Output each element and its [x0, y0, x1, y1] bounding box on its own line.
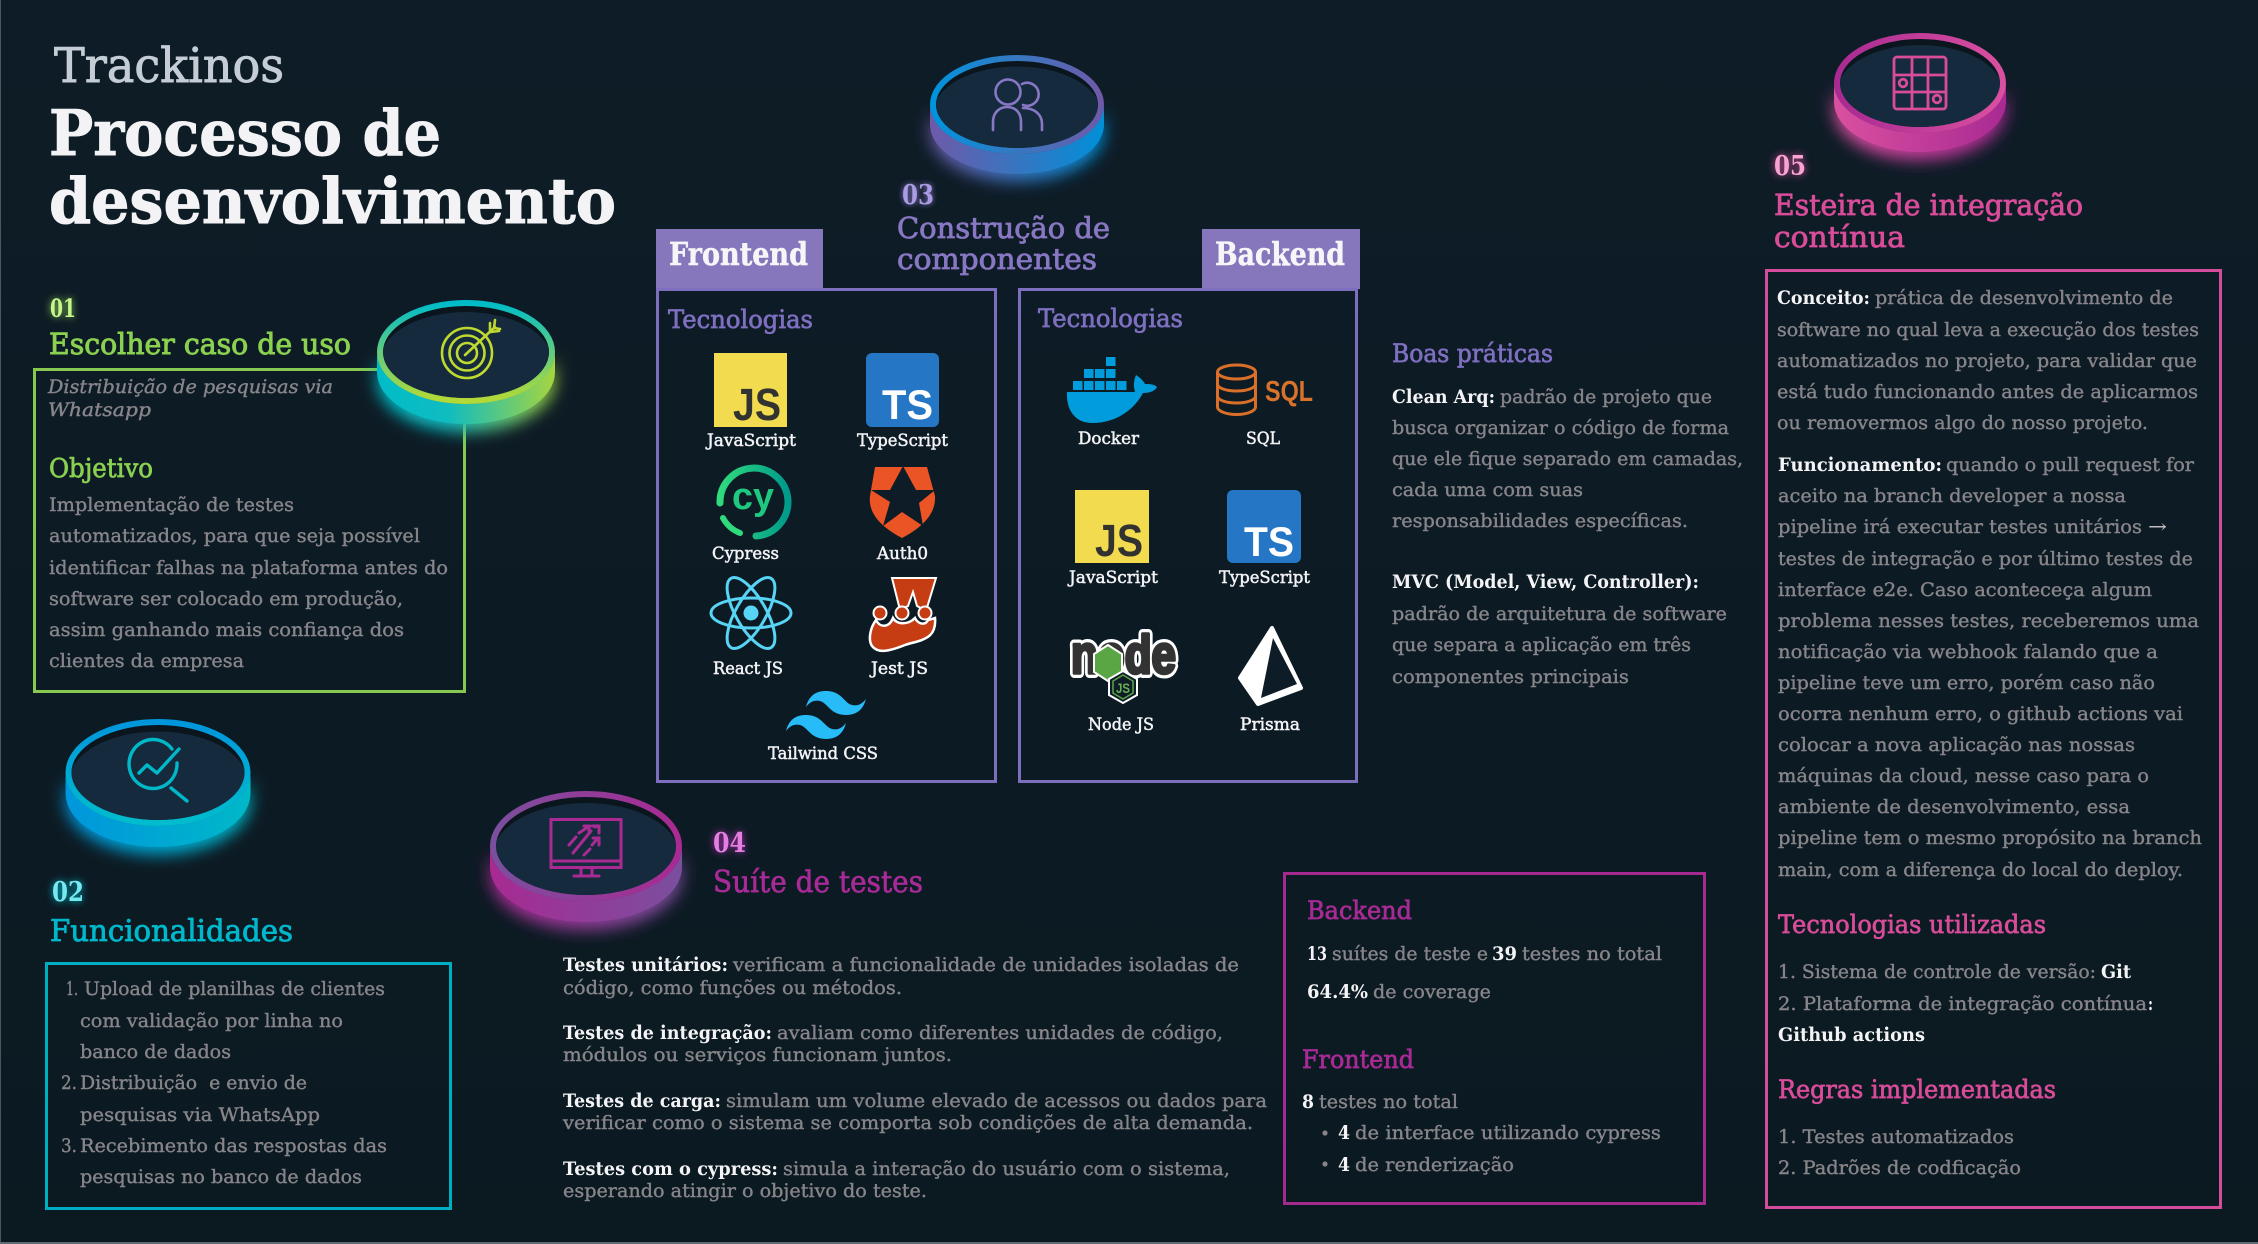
conceito: software no qual leva a execução dos testes	[1777, 319, 2199, 341]
box 05	[1766, 270, 2220, 1208]
tecnologias utilizadas list	[1778, 961, 2153, 1046]
box 01	[34, 370, 464, 692]
icon: people	[993, 80, 1042, 130]
testes unitarios	[563, 954, 1239, 999]
funcionamento: main, com a diferença do local do deploy.	[1778, 859, 2183, 881]
tech: JavaScript: JavaScript	[1067, 568, 1158, 588]
mvc text	[1392, 571, 1727, 688]
clean arq text: que ele fique separado em camadas,	[1392, 448, 1743, 470]
objetivo text: software ser colocado em produção,	[49, 588, 403, 610]
backend stats: 64.4%	[1307, 981, 1368, 1003]
section number 02: 02	[52, 877, 84, 908]
funcionamento: quando o pull request for	[1946, 454, 2195, 476]
funcionamento: testes de integração e por último testes de	[1778, 548, 2193, 570]
funcionamento: ocorra nenhum erro, o github actions vai	[1778, 703, 2183, 725]
heading 05	[1774, 188, 2083, 254]
tech: Jest JS	[869, 578, 936, 679]
frontend stats: 4	[1338, 1154, 1350, 1176]
section number 05: 05	[1774, 151, 1806, 182]
testes unitarios: Testes unitários:	[563, 954, 728, 976]
clean arq text: busca organizar o código de forma	[1392, 417, 1729, 439]
funcionamento: interface e2e. Caso aconteceça algum	[1778, 579, 2152, 601]
tech: SQL: SQL	[1246, 429, 1280, 449]
tech: TypeScript: TypeScript	[857, 431, 948, 451]
funcionamento: →	[2148, 516, 2167, 538]
objetivo text: identificar falhas na plataforma antes do	[49, 557, 448, 579]
heading 05: contínua	[1774, 220, 1905, 254]
funcionamento: notificação via webhook falando que a	[1778, 641, 2158, 663]
tab: frontend: Frontend	[669, 235, 808, 273]
objetivo text: assim ganhando mais confiança dos	[49, 619, 404, 641]
tech: Node JS: node	[1071, 625, 1176, 685]
tech: Tailwind CSS: Tailwind CSS	[768, 744, 878, 764]
conceito: prática de desenvolvimento de	[1875, 287, 2173, 309]
backend stats: 39	[1492, 943, 1517, 965]
objetivo text: clientes da empresa	[49, 650, 244, 672]
tecnologias utilizadas list: 2. Plataforma de integração contínua	[1778, 993, 2147, 1015]
tech: JavaScript: JS	[1095, 515, 1143, 566]
tech: Jest JS: Jest JS	[869, 659, 928, 679]
funcionamento: problema nesses testes, receberemos uma	[1778, 610, 2199, 632]
tech: TypeScript: TS	[1244, 518, 1294, 565]
icon: target	[442, 320, 500, 378]
clean arq text: padrão de projeto que	[1500, 386, 1712, 408]
testes de carga: simulam um volume elevado de acessos ou dados para	[726, 1090, 1267, 1112]
tab: frontend	[656, 229, 823, 289]
tech: Node JS: Node JS	[1088, 715, 1154, 735]
tech: Cypress: cy	[732, 476, 774, 518]
tech: TypeScript	[857, 353, 948, 451]
panel: boas praticas	[1392, 339, 1743, 688]
disc: grid icon	[1834, 36, 2006, 160]
tecnologias utilizadas list: :	[2148, 993, 2153, 1015]
testes unitarios: verificam a funcionalidade de unidades isoladas de	[732, 954, 1239, 976]
frontend heading: Frontend	[1302, 1045, 1414, 1074]
heading 03: Construção de	[897, 211, 1110, 245]
heading 02: Funcionalidades	[50, 914, 293, 949]
list 02: 3.	[61, 1135, 77, 1157]
backend stats: 13	[1307, 943, 1327, 965]
tech: Node JS: JS	[1116, 680, 1130, 696]
testes com o cypress	[563, 1158, 1230, 1202]
clean arq text	[1392, 386, 1743, 532]
backend stats	[1307, 943, 1662, 1003]
funcionamento: Funcionamento:	[1778, 454, 1942, 476]
tech: SQL: SQL	[1265, 376, 1313, 408]
testes com o cypress: esperando atingir o objetivo do teste.	[563, 1180, 927, 1202]
panel: resultados dos testes	[1284, 874, 1704, 1204]
tech: Docker: Docker	[1078, 429, 1140, 449]
tecnologias utilizadas list: 1. Sistema de controle de versão:	[1778, 961, 2096, 983]
testes de carga: Testes de carga:	[563, 1090, 721, 1112]
funcionamento: pipeline tem o mesmo propósito na branch	[1778, 827, 2202, 849]
frontend stats: de renderização	[1355, 1154, 1514, 1176]
mvc text: componentes principais	[1392, 666, 1629, 688]
objetivo text: Implementação de testes	[49, 494, 294, 516]
list 02	[61, 978, 387, 1188]
title: Processo de	[49, 96, 441, 170]
testes de integracao: avaliam como diferentes unidades de código,	[777, 1022, 1223, 1044]
conceito: ou removermos algo do nosso projeto.	[1777, 412, 2148, 434]
testes de integracao: Testes de integração:	[563, 1022, 772, 1044]
heading: Tecnologias	[1038, 304, 1183, 333]
tech: TypeScript: TS	[882, 381, 933, 428]
tech: JavaScript	[705, 353, 796, 451]
title	[49, 38, 616, 238]
testes de carga	[562, 1090, 1267, 1134]
section number 01: 01	[50, 294, 76, 323]
heading 03	[897, 211, 1110, 276]
tech: Prisma: Prisma	[1240, 715, 1300, 735]
backend heading: Backend	[1307, 896, 1412, 925]
frontend stats: de interface utilizando cypress	[1355, 1122, 1661, 1144]
panel: 03 construcao de componentes heading	[897, 180, 1110, 276]
title: Trackinos	[54, 38, 284, 94]
list 02: 2.	[61, 1072, 77, 1094]
clean arq text: responsabilidades específicas.	[1392, 510, 1688, 532]
regras implementadas list: 1. Testes automatizados	[1778, 1126, 2014, 1148]
tech: React JS: React JS	[713, 659, 783, 679]
objetivo text	[49, 494, 448, 672]
tech: JavaScript	[1067, 490, 1158, 588]
conceito: Conceito:	[1777, 287, 1870, 309]
panel: backend technologies	[1020, 290, 1356, 782]
mvc text: MVC (Model, View, Controller):	[1392, 571, 1699, 593]
tab: backend	[1202, 229, 1360, 289]
tech: React JS	[711, 571, 791, 679]
icon: magnifier chart	[129, 739, 187, 801]
heading 01: Escolher caso de uso	[49, 327, 351, 361]
tech: Tailwind CSS	[768, 691, 878, 764]
tech: JavaScript: JS	[733, 379, 781, 430]
panel: 02 funcionalidades	[46, 877, 450, 1208]
tech: Prisma	[1240, 628, 1301, 735]
tech: SQL	[1218, 365, 1313, 449]
frontend stats: 8	[1302, 1091, 1314, 1113]
testes com o cypress: Testes com o cypress:	[563, 1158, 778, 1180]
list 02: 1.	[66, 978, 78, 1000]
frontend stats	[1302, 1091, 1661, 1176]
heading 03: componentes	[897, 242, 1097, 276]
backend stats: testes no total	[1522, 943, 1662, 965]
heading: Tecnologias	[668, 305, 813, 334]
subtitle: Whatsapp	[48, 399, 151, 421]
disc: analytics icon	[66, 722, 250, 854]
tech: Node JS: node	[1071, 625, 1176, 685]
funcionamento	[1778, 454, 2202, 881]
disc: people icon	[930, 58, 1104, 182]
heading 04: Suíte de testes	[713, 865, 923, 900]
disc: target icon	[377, 303, 555, 432]
tecnologias utilizadas heading: Tecnologias utilizadas	[1778, 910, 2046, 939]
testes de carga: verificar como o sistema se comporta sob condições de alta demanda.	[562, 1112, 1253, 1134]
funcionamento: pipeline irá executar testes unitários	[1778, 516, 2142, 538]
tech: Auth0	[870, 466, 935, 564]
conceito: automatizados no projeto, para validar que	[1777, 350, 2197, 372]
section number 03: 03	[902, 180, 934, 211]
funcionamento: pipeline teve um erro, porém caso não	[1778, 672, 2155, 694]
tech: Auth0: Auth0	[876, 544, 928, 564]
subtitle	[47, 376, 333, 421]
tecnologias utilizadas list: Github actions	[1778, 1024, 1925, 1046]
testes de integracao	[563, 1022, 1223, 1066]
clean arq text: Clean Arq:	[1392, 386, 1495, 408]
panel: 01 escolher caso de uso	[34, 294, 464, 692]
box 02	[46, 964, 450, 1208]
subtitle: Distribuição de pesquisas via	[47, 376, 333, 398]
mvc text: que separa a aplicação em três	[1392, 634, 1691, 656]
tech: JavaScript: JavaScript	[705, 431, 796, 451]
regras implementadas list	[1778, 1126, 2021, 1179]
panel: 05 esteira de integracao continua	[1766, 151, 2220, 1208]
list 02: Recebimento das respostas das	[80, 1135, 387, 1157]
conceito: está tudo funcionando antes de aplicarmos	[1777, 381, 2198, 403]
panel: frontend technologies	[658, 290, 996, 782]
objetivo heading: Objetivo	[49, 454, 153, 484]
testes com o cypress: simula a interação do usuário com o sistema,	[783, 1158, 1230, 1180]
tech: Docker	[1067, 357, 1157, 449]
tab: backend: Backend	[1215, 235, 1345, 273]
mvc text: padrão de arquitetura de software	[1392, 603, 1727, 625]
frontend stats: 4	[1338, 1122, 1350, 1144]
list 02: pesquisas via WhatsApp	[80, 1104, 320, 1126]
frontend stats: testes no total	[1319, 1091, 1458, 1113]
funcionamento: aceito na branch developer a nossa	[1778, 485, 2126, 507]
list 02: Upload de planilhas de clientes	[84, 978, 385, 1000]
tech: Node JS	[1071, 625, 1176, 735]
icon: grid	[1894, 57, 1946, 109]
clean arq text: cada uma com suas	[1392, 479, 1583, 501]
funcionamento: ambiente de desenvolvimento, essa	[1778, 796, 2130, 818]
funcionamento: colocar a nova aplicação nas nossas	[1778, 734, 2135, 756]
list 02: pesquisas no banco de dados	[80, 1166, 362, 1188]
panel: 04 suite de testes	[562, 828, 1267, 1202]
regras implementadas list: 2. Padrões de codficação	[1778, 1157, 2021, 1179]
tech: TypeScript	[1219, 490, 1310, 588]
conceito	[1777, 287, 2199, 434]
tech: Cypress: Cypress	[712, 544, 779, 564]
objetivo text: automatizados, para que seja possível	[49, 525, 420, 547]
testes de integracao: módulos ou serviços funcionam juntos.	[563, 1044, 952, 1066]
section number 04: 04	[713, 828, 746, 859]
list 02: banco de dados	[80, 1041, 231, 1063]
list 02: com validação por linha no	[80, 1010, 343, 1032]
tecnologias utilizadas list: Git	[2101, 961, 2131, 983]
tech: Cypress	[712, 468, 788, 564]
tech: TypeScript: TypeScript	[1219, 568, 1310, 588]
regras implementadas heading: Regras implementadas	[1778, 1075, 2056, 1104]
backend stats: de coverage	[1373, 981, 1491, 1003]
list 02: Distribuição e envio de	[80, 1072, 307, 1094]
backend stats: suítes de teste e	[1332, 943, 1488, 965]
testes unitarios: código, como funções ou métodos.	[563, 977, 902, 999]
disc: monitor icon	[490, 794, 682, 930]
icon: monitor with arrows	[551, 820, 621, 876]
funcionamento: máquinas da cloud, nesse caso para o	[1778, 765, 2149, 787]
title: desenvolvimento	[49, 164, 616, 238]
heading: Boas práticas	[1392, 339, 1553, 368]
heading 05: Esteira de integração	[1774, 188, 2083, 222]
